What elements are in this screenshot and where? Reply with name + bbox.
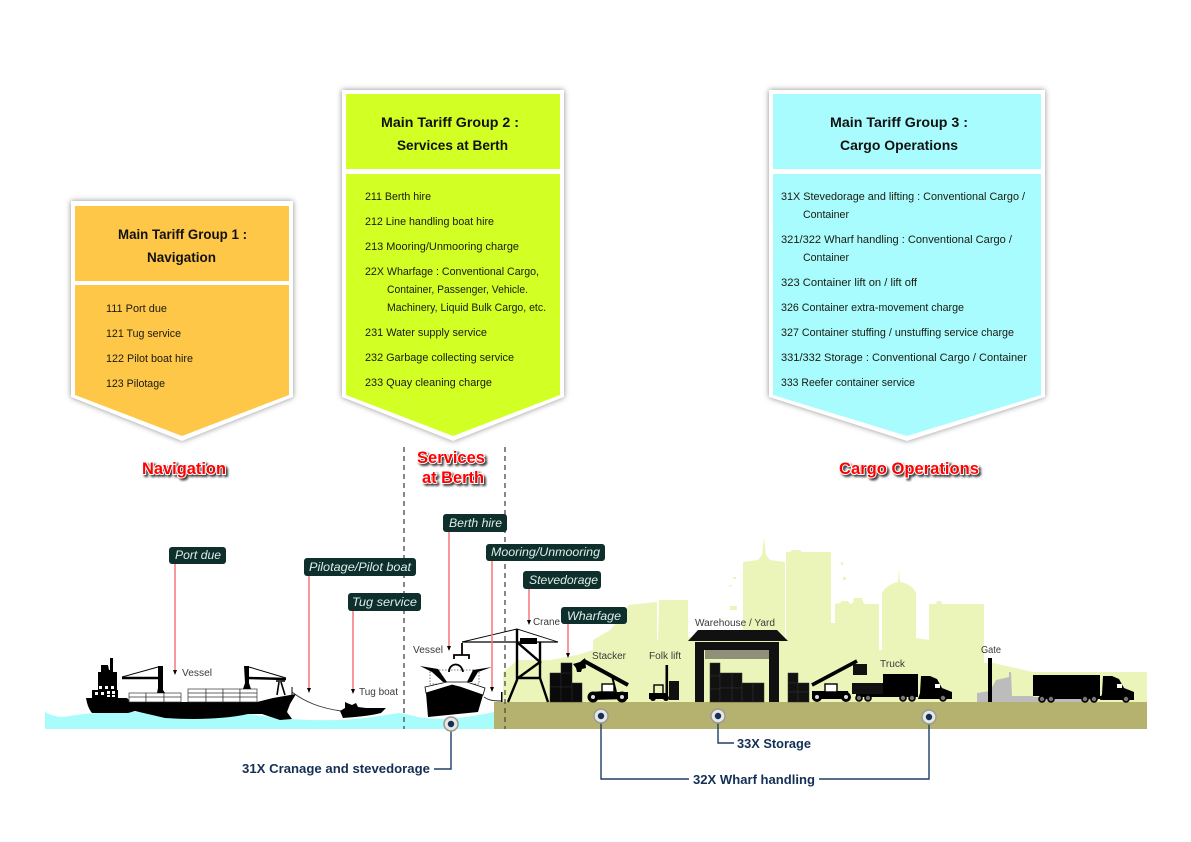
list: group 3 items: 327 Container stuffing / unstuffing service charge bbox=[781, 327, 1014, 339]
equipment labels: Gate bbox=[981, 645, 1001, 656]
quay ground bbox=[494, 702, 1147, 729]
icon: truck at gate bbox=[1033, 675, 1134, 702]
callout: port due bbox=[169, 547, 226, 675]
heading: group 3 bbox=[830, 114, 968, 153]
connector: 31X cranage and stevedorage bbox=[242, 717, 458, 776]
icon: quay crane bbox=[462, 629, 558, 702]
callout: tug service bbox=[348, 593, 421, 694]
list: group 3 items bbox=[781, 191, 1027, 389]
panel: main tariff group 3 cargo operations bbox=[769, 90, 1045, 441]
list: group 1 items: 121 Tug service bbox=[106, 328, 181, 340]
icon: truck bbox=[852, 674, 952, 701]
icon: stacker 1 bbox=[573, 658, 628, 702]
heading: Services at Berth bbox=[417, 448, 485, 487]
list: group 2 items bbox=[365, 191, 546, 389]
heading: group 3: Main Tariff Group 3 : bbox=[830, 114, 968, 130]
equipment labels: Folk lift bbox=[649, 651, 681, 662]
connector: 32X wharf handling bbox=[594, 709, 936, 787]
heading: group 2: Services at Berth bbox=[397, 137, 508, 153]
equipment labels: Warehouse / Yard bbox=[695, 618, 775, 629]
list: group 3 items: Container bbox=[803, 209, 849, 221]
icon: stacker 2 bbox=[812, 661, 867, 702]
callout: mooring and unmooring bbox=[486, 544, 605, 692]
icon: gray truck at gate bbox=[977, 672, 1093, 702]
callout: berth hire bbox=[443, 514, 507, 651]
heading: group 1: Navigation bbox=[147, 249, 216, 265]
icon: container stack near crane bbox=[550, 663, 582, 702]
icon: gate post bbox=[988, 658, 992, 702]
list: group 2 items: 232 Garbage collecting service bbox=[365, 352, 514, 364]
icon: berthed vessel front view bbox=[420, 643, 502, 717]
heading: Services at Berth: at Berth bbox=[422, 468, 484, 487]
list: group 2 items: 22X Wharfage : Conventional Cargo, bbox=[365, 266, 539, 278]
list: group 3 items: 323 Container lift on / lift off bbox=[781, 277, 918, 289]
icon: tug boat bbox=[340, 702, 386, 718]
connector: 32X wharf handling: 32X Wharf handling bbox=[693, 772, 815, 787]
list: group 3 items: Container bbox=[803, 252, 849, 264]
list: group 3 items: 326 Container extra-movement charge bbox=[781, 302, 964, 314]
equipment labels: Vessel bbox=[413, 645, 443, 656]
heading: Navigation: Navigation bbox=[142, 459, 226, 478]
equipment labels: Crane bbox=[533, 617, 560, 628]
heading: Cargo Operations: Cargo Operations bbox=[839, 459, 979, 478]
icon: container vessel bbox=[86, 658, 296, 720]
list: group 3 items: 321/322 Wharf handling : Conventional Cargo / bbox=[781, 234, 1013, 246]
equipment labels: Vessel bbox=[182, 668, 212, 679]
list: group 1 items: 123 Pilotage bbox=[106, 378, 165, 390]
panel: main tariff group 1 navigation bbox=[71, 201, 293, 441]
panel: main tariff group 2 services at berth bbox=[342, 90, 564, 441]
connector: 31X cranage and stevedorage: 31X Cranage and stevedorage bbox=[242, 761, 430, 776]
callout: pilotage and pilot boat: Pilotage/Pilot boat bbox=[309, 560, 412, 574]
equipment labels: Tug boat bbox=[359, 687, 398, 698]
list: group 1 items bbox=[106, 303, 193, 390]
list: group 1 items: 111 Port due bbox=[106, 303, 167, 315]
list: group 3 items: 333 Reefer container service bbox=[781, 377, 915, 389]
equipment labels: Truck bbox=[880, 659, 906, 670]
heading: group 3: Cargo Operations bbox=[840, 137, 958, 153]
equipment labels: Stacker bbox=[592, 651, 627, 662]
callout: berth hire: Berth hire bbox=[449, 516, 502, 530]
callout: tug service: Tug service bbox=[352, 595, 417, 609]
list: group 2 items: Container, Passenger, Vehicle. bbox=[387, 284, 528, 296]
icon: fork lift bbox=[649, 665, 679, 701]
list: group 2 items: 233 Quay cleaning charge bbox=[365, 377, 492, 389]
icon: warehouse bbox=[688, 630, 788, 702]
equipment labels bbox=[182, 617, 1001, 698]
water bbox=[45, 712, 494, 729]
callout: stevedorage bbox=[523, 571, 601, 625]
list: group 2 items: Machinery, Liquid Bulk Cargo, etc. bbox=[387, 302, 546, 314]
icon: tow line bbox=[292, 692, 341, 711]
heading: group 1: Main Tariff Group 1 : bbox=[118, 226, 247, 242]
list: group 1 items: 122 Pilot boat hire bbox=[106, 353, 193, 365]
zone divider dashed lines bbox=[404, 447, 505, 729]
heading: group 2 bbox=[381, 114, 519, 153]
list: group 2 items: 231 Water supply service bbox=[365, 327, 487, 339]
heading: group 2: Main Tariff Group 2 : bbox=[381, 114, 519, 130]
list: group 3 items: 31X Stevedorage and lifting : Conventional Cargo / bbox=[781, 191, 1026, 203]
heading: group 1 bbox=[118, 226, 247, 265]
callout: wharfage bbox=[561, 607, 627, 658]
city skyline background bbox=[503, 537, 1147, 702]
callout: mooring and unmooring: Mooring/Unmooring bbox=[491, 545, 600, 559]
callout: wharfage: Wharfage bbox=[567, 609, 621, 623]
list: group 2 items: 211 Berth hire bbox=[365, 191, 431, 203]
list: group 2 items: 212 Line handling boat hire bbox=[365, 216, 494, 228]
list: group 2 items: 213 Mooring/Unmooring charge bbox=[365, 241, 519, 253]
connector: 33X storage: 33X Storage bbox=[737, 736, 811, 751]
callout: port due: Port due bbox=[175, 548, 221, 562]
connector: 33X storage bbox=[711, 709, 811, 751]
list: group 3 items: 331/332 Storage : Conventional Cargo / Container bbox=[781, 352, 1027, 364]
callout: pilotage and pilot boat bbox=[304, 558, 416, 693]
heading: Services at Berth: Services bbox=[417, 448, 485, 467]
icon: container stack right of warehouse bbox=[788, 673, 809, 702]
callout: stevedorage: Stevedorage bbox=[529, 573, 598, 587]
